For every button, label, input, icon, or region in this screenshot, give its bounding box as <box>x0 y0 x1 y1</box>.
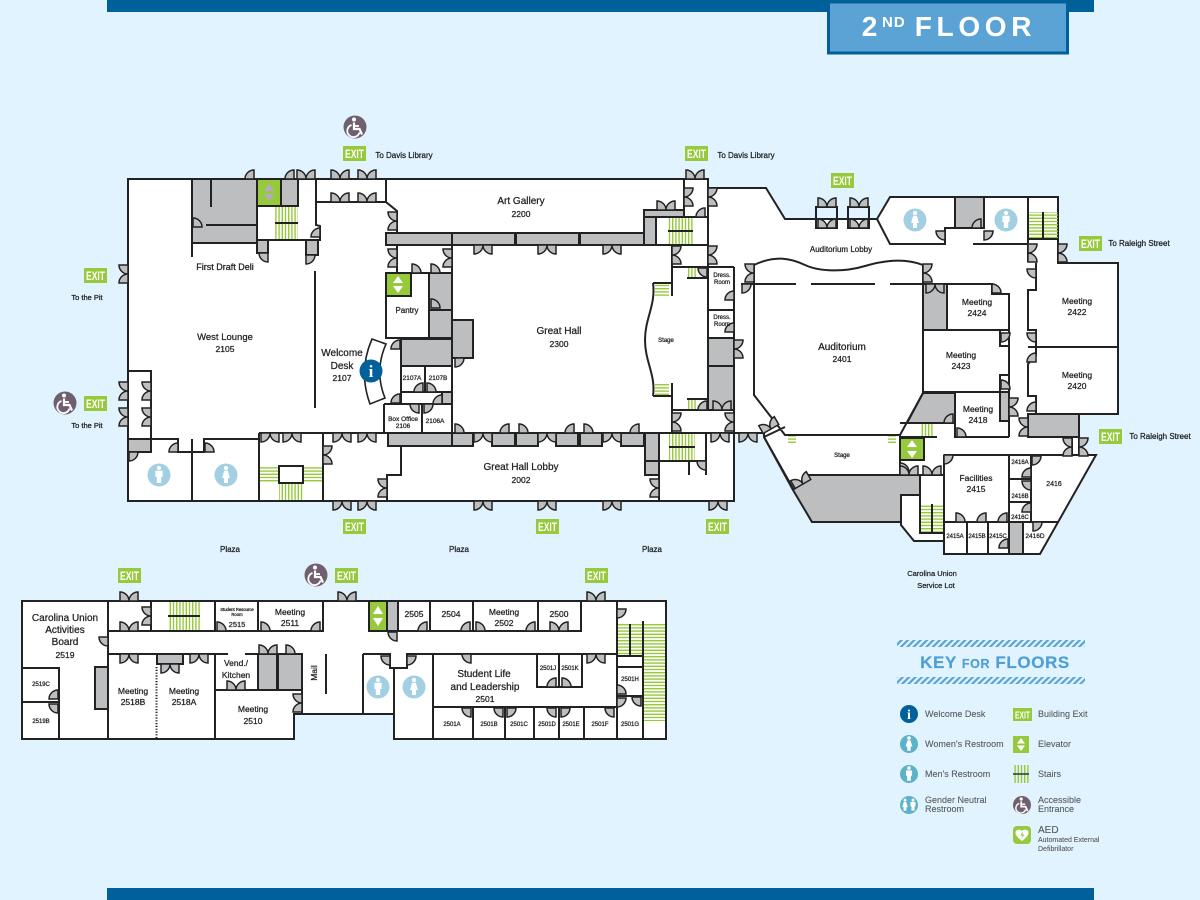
room labels: main building: Meeting <box>963 404 993 414</box>
exit signs: EXIT <box>833 174 852 188</box>
room labels: lower wing: 2515 <box>229 620 245 629</box>
elevator: pantry <box>386 273 411 296</box>
outdoor labels: To the Pit <box>71 421 104 430</box>
room labels: main building: Art Gallery <box>497 196 545 207</box>
outdoor labels: To Raleigh Street <box>1129 432 1191 441</box>
legend item: women's restroom <box>900 735 1004 753</box>
legend item: gender neutral restroom: Restroom <box>925 804 964 814</box>
room labels: main building: 2105 <box>216 344 235 354</box>
legend item: AED: Defibrillator <box>1038 846 1074 853</box>
outdoor labels: Plaza <box>220 545 241 554</box>
legend item: AED: Automated External <box>1038 837 1100 844</box>
legend item: men's restroom: Men's Restroom <box>925 769 990 779</box>
exit signs: EXIT <box>1081 237 1100 251</box>
legend item: building exit: EXIT <box>1015 710 1030 722</box>
room labels: lower wing: Carolina Union <box>32 613 98 624</box>
room labels: main building: Meeting <box>962 297 992 307</box>
room labels: main building: 2416B <box>1011 494 1029 500</box>
legend item: welcome desk <box>900 705 986 723</box>
room labels: lower wing: Student Resource <box>220 607 254 612</box>
elevator: west (inactive) <box>257 179 281 206</box>
room labels: lower wing: Mail <box>309 665 319 681</box>
floor plan: main building <box>119 170 1118 554</box>
exit signs: EXIT <box>86 397 105 411</box>
room labels: main building: 2416D <box>1025 533 1045 540</box>
title: ND <box>882 14 906 31</box>
room labels: main building: Box Office <box>388 416 418 423</box>
room labels: lower wing: 2501K <box>561 666 579 672</box>
room labels: main building: Meeting <box>1062 370 1092 380</box>
room labels: main building: 2416C <box>1011 515 1030 521</box>
icon: welcome desk info <box>360 360 382 382</box>
exit signs: EXIT <box>86 269 105 283</box>
legend item: AED <box>1013 825 1100 853</box>
room labels: main building: Great Hall <box>536 326 582 337</box>
walls <box>128 179 1118 554</box>
room labels: main building: 2416 <box>1046 481 1062 488</box>
legend item: elevator <box>1013 736 1071 753</box>
outdoor labels: To Davis Library <box>717 151 775 160</box>
outdoor labels: To Davis Library <box>375 151 433 160</box>
room labels: lower wing: 2518A <box>172 697 197 707</box>
exit signs: EXIT <box>587 569 606 583</box>
legend: key for floors <box>897 640 1100 853</box>
wing footprint <box>22 601 666 739</box>
room labels: lower wing: and Leadership <box>451 682 520 693</box>
room labels: lower wing: 2505 <box>405 609 424 619</box>
legend item: gender neutral restroom: Gender Neutral <box>925 795 987 805</box>
title <box>828 2 1068 53</box>
room labels: lower wing: 2501H <box>621 677 639 683</box>
room labels: lower wing: Student Life <box>457 669 511 680</box>
room labels: main building: 2415B <box>968 534 986 540</box>
legend item: AED: AED <box>1038 825 1059 836</box>
restroom icons <box>148 208 1018 698</box>
room labels: main building: 2106 <box>396 423 411 430</box>
welcome desk counter <box>364 339 386 404</box>
doors <box>119 170 1088 548</box>
room labels: lower wing: Meeting <box>169 686 199 696</box>
room labels: lower wing: Board <box>52 637 78 648</box>
top bar <box>107 0 1094 12</box>
room labels: lower wing: 2501J <box>540 666 556 672</box>
room labels: lower wing: 2501 <box>476 694 495 704</box>
room labels: lower wing: 2500 <box>550 609 569 619</box>
room labels: main building: 2107B <box>429 375 447 382</box>
room labels: lower wing: 2502 <box>495 618 514 628</box>
room labels: lower wing: 2501F <box>591 722 609 728</box>
legend item: building exit <box>1013 708 1088 722</box>
room labels: main building: 2420 <box>1068 381 1087 391</box>
room labels: main building: 2416A <box>1011 460 1029 466</box>
room labels: lower wing: Meeting <box>275 607 305 617</box>
legend item: stairs: Stairs <box>1038 769 1062 779</box>
icon: welcome desk info: i <box>369 362 374 381</box>
outdoor labels <box>71 151 1191 590</box>
room labels: lower wing: 2501E <box>562 722 580 728</box>
title: FLOOR <box>915 11 1036 42</box>
room labels: main building: Pantry <box>395 306 419 315</box>
building footprint <box>128 179 1118 554</box>
room labels: lower wing: Meeting <box>489 607 519 617</box>
title: 2 <box>862 11 882 42</box>
legend item: women's restroom: Women's Restroom <box>925 739 1004 749</box>
room labels: main building: Desk <box>331 361 354 372</box>
room labels: main building: Dress. <box>713 273 731 279</box>
legend heading: KEY FOR FLOORS <box>920 653 1070 672</box>
legend item: men's restroom <box>900 765 990 783</box>
legend item: elevator: Elevator <box>1038 739 1071 749</box>
floor plan: lower wing <box>22 592 666 739</box>
room labels: main building: Stage <box>658 338 674 344</box>
elevator <box>369 601 387 631</box>
room labels: main building: First Draft Deli <box>196 262 254 272</box>
exit signs: EXIT <box>687 147 706 161</box>
legend item: building exit: Building Exit <box>1038 709 1088 719</box>
room labels: lower wing: Kitchen <box>222 670 250 680</box>
room labels: main building: 2107A <box>403 375 422 382</box>
legend stripes <box>897 640 1085 684</box>
room labels: lower wing: Vend./ <box>224 658 249 668</box>
room labels: main building: Meeting <box>946 350 976 360</box>
room labels: main building: Great Hall Lobby <box>483 462 559 473</box>
room labels: lower wing: Activities <box>45 625 85 636</box>
room labels: main building <box>196 196 1092 540</box>
stairs <box>259 207 1058 532</box>
room labels: main building: West Lounge <box>197 332 253 343</box>
exit signs <box>84 146 1122 583</box>
room labels: main building: 2200 <box>512 209 531 219</box>
exit signs: EXIT <box>337 569 356 583</box>
outdoor labels: To Raleigh Street <box>1108 239 1170 248</box>
room labels: main building: 2418 <box>969 415 988 425</box>
room labels: main building: Room <box>714 322 730 328</box>
exit signs: EXIT <box>120 569 139 583</box>
room labels: main building: 2415C <box>989 534 1008 540</box>
room labels: main building: 2424 <box>968 308 987 318</box>
room labels: lower wing <box>32 607 639 728</box>
legend item: accessible entrance <box>1013 795 1081 814</box>
accessible entrance icons <box>54 116 366 586</box>
room labels: lower wing: 2501G <box>621 722 639 728</box>
room labels: main building: 2423 <box>952 361 971 371</box>
walls <box>22 601 643 739</box>
room labels: main building: 2415 <box>967 484 986 494</box>
room labels: main building: 2415A <box>946 534 964 540</box>
room labels: main building: 2106A <box>426 418 445 425</box>
room labels: lower wing: 2519C <box>32 682 51 688</box>
room labels: main building: Facilities <box>959 473 993 483</box>
legend item: welcome desk: Welcome Desk <box>925 709 986 719</box>
room labels: lower wing: 2518B <box>121 697 146 707</box>
doors <box>49 592 641 717</box>
room labels: main building: Auditorium Lobby <box>810 245 872 254</box>
room labels: main building: 2002 <box>512 475 531 485</box>
service rooms <box>95 601 398 709</box>
exit signs: EXIT <box>538 520 557 534</box>
room labels: lower wing: 2519 <box>56 650 75 660</box>
room labels: main building: 2401 <box>833 354 852 364</box>
room labels: lower wing: 2501D <box>538 722 557 728</box>
room labels: lower wing: 2501C <box>510 722 529 728</box>
outdoor labels: To the Pit <box>71 293 104 302</box>
legend item: accessible entrance: Entrance <box>1038 804 1074 814</box>
room labels: lower wing: 2511 <box>281 618 299 628</box>
elevator: auditorium <box>900 438 924 460</box>
room labels: main building: Meeting <box>1062 296 1092 306</box>
outdoor labels: Service Lot <box>917 581 956 590</box>
legend item: welcome desk: i <box>907 708 911 723</box>
room labels: main building: 2422 <box>1068 307 1087 317</box>
room labels: lower wing: 2519B <box>32 719 50 725</box>
outdoor labels: Carolina Union <box>907 569 957 578</box>
legend item: stairs <box>1013 765 1062 783</box>
exit signs: EXIT <box>1101 430 1120 444</box>
room labels: lower wing: 2501B <box>480 722 498 728</box>
room labels: main building: Room <box>714 280 730 286</box>
exit signs: EXIT <box>345 520 364 534</box>
room labels: lower wing: 2501A <box>443 722 461 728</box>
service and storage rooms <box>128 179 1079 554</box>
room labels: lower wing: Room <box>231 612 243 617</box>
room labels: lower wing: Meeting <box>118 686 148 696</box>
room labels: main building: Auditorium <box>818 342 866 353</box>
stairs <box>168 602 665 721</box>
room labels: main building: Dress. <box>713 315 731 321</box>
dotted partition <box>156 667 158 739</box>
outdoor labels: Plaza <box>642 545 663 554</box>
room labels: lower wing: 2504 <box>442 609 461 619</box>
room labels: lower wing: Meeting <box>238 704 268 714</box>
bottom bar <box>107 888 1094 900</box>
room labels: main building: 2300 <box>550 339 569 349</box>
exit signs: EXIT <box>345 147 364 161</box>
outdoor labels: Plaza <box>449 545 470 554</box>
room labels: lower wing: 2510 <box>244 716 263 726</box>
exit signs: EXIT <box>708 520 727 534</box>
legend item: accessible entrance: Accessible <box>1038 795 1081 805</box>
room labels: main building: 2107 <box>333 373 352 383</box>
legend item: gender neutral restroom <box>900 795 987 814</box>
room labels: main building: Stage <box>834 453 850 459</box>
room labels: main building: Welcome <box>321 348 363 359</box>
